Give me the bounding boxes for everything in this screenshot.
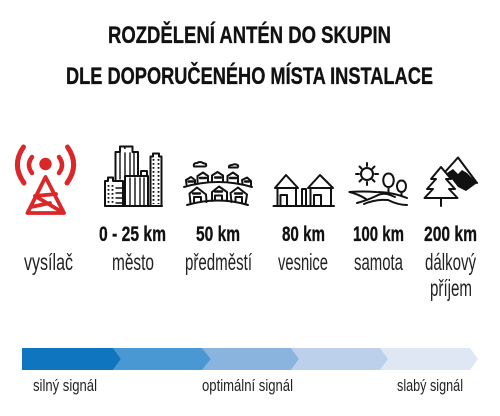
label: vesnice: vesnice (278, 249, 328, 275)
label: optimální signál: optimální signál (202, 377, 293, 395)
signal strength arrow bar (22, 348, 478, 370)
label: silný signál: silný signál (33, 377, 97, 395)
distance: 200 km: 200 km (424, 223, 477, 246)
column: město (99, 146, 166, 275)
label: vysílač: vysílač (24, 249, 73, 275)
label: dálkový příjem (425, 249, 476, 301)
icon: suburb houses (184, 162, 252, 205)
label: samota: samota (354, 249, 403, 275)
distance: 0 - 25 km: 0 - 25 km (99, 223, 166, 246)
column: předměstí (184, 162, 252, 275)
distance: 80 km: 80 km (282, 223, 325, 246)
label: předměstí: předměstí (185, 249, 252, 275)
label: město: město (112, 249, 154, 275)
icon: mountain and pine tree (424, 158, 477, 206)
icon: village houses (274, 175, 334, 206)
label: slabý signál: slabý signál (397, 377, 463, 395)
distance: 100 km: 100 km (353, 223, 404, 246)
icon: city skyscrapers (105, 146, 162, 206)
column: vysílač (17, 147, 74, 275)
column: vesnice (274, 175, 334, 275)
column: samota (350, 163, 407, 275)
title: ROZDĚLENÍ ANTÉN DO SKUPIN (108, 21, 391, 49)
label: dálkový příjem: příjem (430, 275, 472, 301)
icon: sun, trees and hills (350, 163, 407, 205)
distance: 50 km: 50 km (196, 223, 240, 246)
column: dálkový příjem (424, 158, 477, 301)
title (66, 21, 433, 90)
icon: red transmitter tower (17, 147, 74, 213)
